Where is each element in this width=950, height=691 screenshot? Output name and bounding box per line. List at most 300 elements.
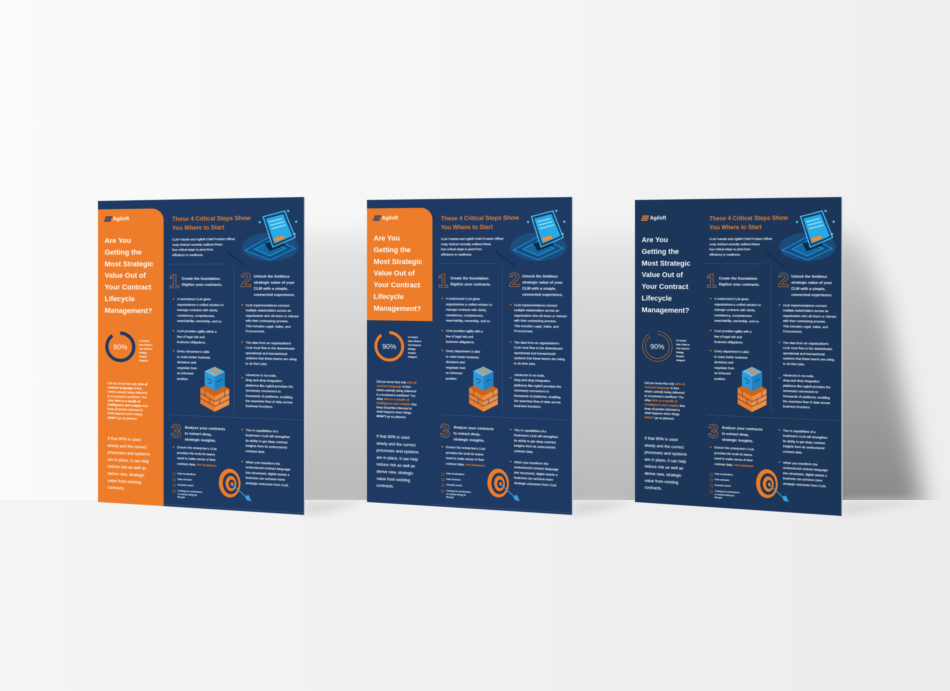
step 1 heading: Create the foundation. xyxy=(182,277,221,281)
step 2 bullets xyxy=(510,303,568,409)
step 2 bullets: Advances in no-code, xyxy=(514,373,545,377)
step 2 bullets xyxy=(778,303,842,413)
step 2 bullets xyxy=(241,303,300,409)
step 2 bullets: to do their jobs. xyxy=(783,362,805,366)
icon: target with arrow xyxy=(218,468,252,502)
step 2 heading: connected experience. xyxy=(254,293,295,297)
step 3 right bullets xyxy=(510,428,559,487)
logo: Agiloft xyxy=(382,215,398,221)
icon: logo mark xyxy=(641,215,649,221)
step 2 bullets: Advances in no-code, xyxy=(246,373,277,377)
text: if that 90%: If that 90% is used xyxy=(645,436,678,442)
step 3 heading: strategic insights. xyxy=(453,437,485,443)
checklist xyxy=(172,472,203,499)
step 1 bullets: CLM provides agility with a xyxy=(446,329,483,333)
step 2 bullets: The data from an organization's xyxy=(514,340,559,345)
donut caption xyxy=(676,339,690,362)
title: Are You xyxy=(374,234,400,242)
heading xyxy=(440,214,520,231)
step 3 right bullets: When you transform the xyxy=(514,460,548,466)
intro text xyxy=(172,237,236,258)
text: if that 90%: reduce risk as well as xyxy=(376,462,415,469)
title: Getting the xyxy=(374,246,411,254)
step 2 bullets: the seamless flow of data across xyxy=(783,399,830,405)
step 2 bullets: Advances in no-code, xyxy=(783,373,814,378)
step 2 bullets: platforms like Agiloft provides the xyxy=(783,384,831,389)
text: if that 90%: reduce risk as well as xyxy=(645,464,683,471)
icon: target with arrow xyxy=(755,468,793,504)
chart: 90% donut: 90% xyxy=(113,342,126,350)
step 2 bullets: Procurement. xyxy=(514,329,533,333)
step 3 right bullets: insights from its unstructured xyxy=(246,444,287,449)
step 2 bullets: operational and transactional xyxy=(514,351,555,356)
step 1 heading: Create the foundation. xyxy=(450,276,489,281)
checklist: Tracking the performance xyxy=(715,490,740,494)
step 2 bullets: Procurement. xyxy=(246,329,265,333)
step 1 bullets: consistency, completeness, xyxy=(446,313,484,317)
step 3 bullet xyxy=(709,444,773,471)
step 1 bullets: few of legal risk and xyxy=(446,334,473,338)
step 1 bullets: business obligations. xyxy=(714,340,743,344)
step 1 bullets xyxy=(172,297,224,381)
text: did you know: contract language is less xyxy=(645,386,679,390)
flyer 3: all navy version xyxy=(635,197,842,516)
step 3 right bullets: into structured, digital assets a xyxy=(246,470,289,477)
donut caption: Your Business xyxy=(139,348,152,350)
icon: target with arrow xyxy=(486,468,520,502)
logo: Agiloft xyxy=(650,215,666,221)
step 2 bullets: organization who all share or interact xyxy=(246,314,299,318)
text: did you know: WON'T go as planned. xyxy=(376,414,406,419)
step 3 bullet xyxy=(441,445,486,468)
text: if that 90% xyxy=(645,435,687,494)
donut caption: of Contract xyxy=(676,340,686,342)
step 1 bullets: position. xyxy=(177,377,189,381)
step 3 bullet: need to make sense of their xyxy=(446,456,484,462)
heading: These 4 Critical Steps Show xyxy=(172,215,251,222)
checklist: Tracking the performance xyxy=(177,490,202,494)
step 3 heading xyxy=(184,426,226,443)
title: Lifecycle xyxy=(374,292,404,301)
text: did you know: what's actively being delivered xyxy=(376,388,416,393)
checklist xyxy=(710,472,752,503)
step 2 bullets: multiple stakeholders across an xyxy=(246,308,291,313)
step 3 right bullets: When you transform the xyxy=(783,461,818,466)
text: if that 90%: are in place, it can help xyxy=(108,457,149,464)
donut caption: Data Critical to xyxy=(408,340,421,343)
text: if that 90% xyxy=(376,434,419,489)
checklist: Data visualizations xyxy=(715,473,733,476)
logo: Agiloft xyxy=(113,216,129,222)
text: did you know: contract language is less xyxy=(376,384,411,389)
step 2 bullets: business functions. xyxy=(246,404,273,409)
step 3 bullet: Ensure the enterprise's CLM xyxy=(177,445,217,451)
step 3 right bullets: its ability to get deep contract xyxy=(783,439,825,445)
step 3 bullet: Ensure the enterprise's CLM xyxy=(446,445,485,451)
step 2 bullets: operational and transactional xyxy=(246,351,287,356)
title: Management? xyxy=(374,304,421,313)
step 1 bullets: Every department is able xyxy=(446,349,480,353)
donut caption: of Contract xyxy=(139,340,149,342)
step 1 bullets: manage contracts with clarity, xyxy=(177,308,218,312)
step 3 right bullets: insights from its unstructured xyxy=(514,444,555,449)
checklist: Tracking the performance xyxy=(446,490,471,494)
step 2 heading: Unlock the limitless xyxy=(522,274,558,279)
flyer 2: orange title block version xyxy=(367,197,573,515)
step 3 right bullets xyxy=(778,428,842,496)
title: Your Contract xyxy=(642,282,688,291)
step 1 bullets: to make better business xyxy=(177,355,210,359)
step 2 bullets: multiple stakeholders across an xyxy=(514,308,559,313)
checklist: lifecycle xyxy=(715,496,722,499)
step 1 bullets: organizations a unified solution to xyxy=(177,302,224,307)
step 2 bullets: systems that these teams are using xyxy=(514,356,565,361)
step 2 bullets: CLM must flow to the downstream xyxy=(246,346,295,350)
text: did you know: Did you know that only 10% of xyxy=(645,381,685,386)
heading: These 4 Critical Steps Show xyxy=(709,214,788,222)
step 2 bullets: drag-and-drop integration xyxy=(783,378,820,383)
step 1 bullets xyxy=(709,296,773,384)
step 3 right bullets: strategic outcomes from CLM. xyxy=(514,481,557,487)
step 2 bullets: CLM implementations connect xyxy=(246,303,289,307)
step 3 right bullets: business's CLM will strengthen xyxy=(246,433,290,439)
heading: You Where to Start xyxy=(709,224,762,231)
text: did you know: Did you know that only 10% of xyxy=(376,380,416,384)
donut caption: Untapped xyxy=(676,359,685,362)
text: if that 90%: processes and systems xyxy=(645,450,687,457)
text: if that 90%: value from existing xyxy=(108,478,141,485)
step 2 bullets: thousands of platforms, enabling xyxy=(514,394,561,399)
step 1 bullets: negotiate from xyxy=(177,366,197,370)
text: if that 90%: If that 90% is used xyxy=(108,436,141,442)
step 3 right bullets: its ability to get deep contract xyxy=(246,438,288,444)
step 2 bullets: thousands of platforms, enabling xyxy=(246,394,293,399)
step 3 right bullets: business's CLM will strengthen xyxy=(783,434,827,440)
icon: phone on platform xyxy=(496,210,567,266)
step 2 bullets: systems that these teams are using xyxy=(246,356,297,361)
step 2 heading xyxy=(791,274,832,298)
step 1 heading xyxy=(181,276,222,287)
title: Value Out of xyxy=(374,269,415,277)
title: Value Out of xyxy=(642,271,683,279)
donut caption: Remains xyxy=(408,352,416,354)
title: Lifecycle xyxy=(642,294,672,302)
step 3 heading: to extract deep, xyxy=(722,432,749,437)
step 3 right bullets: business can achieve more xyxy=(246,476,285,482)
text: did you know: intelligence and insights that xyxy=(376,401,417,406)
step 1 bullets: searchability, ownership, and so. xyxy=(177,319,222,323)
step 1 bullets: Every department is able xyxy=(714,349,749,354)
text: if that 90%: are in place, it can help xyxy=(376,455,418,462)
step 1 bullets: an informed xyxy=(714,371,731,375)
step 2 heading xyxy=(522,274,564,297)
text: did you know: keep all parties informed to xyxy=(645,407,680,412)
icon: phone on platform xyxy=(780,207,835,262)
step 3 bullet: need to make sense of their xyxy=(714,456,753,462)
donut caption: Your Business xyxy=(676,347,689,350)
step 2 bullets: Procurement. xyxy=(783,329,802,333)
step 2 heading: strategic value of your xyxy=(254,281,295,285)
heading xyxy=(709,213,788,232)
step 3 right bullets xyxy=(241,428,291,487)
text: did you know: contract language is less xyxy=(108,386,142,390)
donut caption: Strategy xyxy=(139,352,147,354)
heading: These 4 Critical Steps Show xyxy=(441,214,519,222)
step 3 heading: strategic insights. xyxy=(722,438,753,443)
checklist: of contract during its xyxy=(446,493,466,496)
icon: logo mark xyxy=(373,215,381,221)
title: Your Contract xyxy=(374,281,420,289)
step 3 heading: strategic insights. xyxy=(185,438,216,443)
step 1 bullets: decisions and xyxy=(177,360,196,364)
step 1 bullets: CLM provides agility within a xyxy=(177,329,217,333)
text: did you know: WON'T go as planned. xyxy=(108,416,137,420)
step 1 bullets: searchability, ownership, and so. xyxy=(714,319,760,323)
step 3 right bullets: The AI capabilities of a xyxy=(783,429,816,434)
title: Management? xyxy=(642,306,689,314)
step 1 bullets: position. xyxy=(714,377,726,381)
text: did you know xyxy=(644,381,686,420)
title: Management? xyxy=(105,306,152,315)
step 3 bullet: provides the tools its teams xyxy=(177,451,215,456)
icon: logo mark xyxy=(104,216,112,222)
title: Are You xyxy=(105,236,131,245)
step 2 bullets: systems that these teams are using xyxy=(783,356,834,361)
chart: 90% outlined donut xyxy=(642,330,673,362)
step 2 bullets: The data from an organization's xyxy=(246,341,291,345)
step 1 bullets: organizations a unified solution to xyxy=(446,302,492,306)
step 2 bullets: CLM must flow to the downstream xyxy=(514,346,563,350)
step 3 right bullets: into structured, digital assets a xyxy=(514,470,558,476)
text: did you know: other 90% is a wealth of xyxy=(645,398,677,403)
step 3 bullet: need to make sense of their xyxy=(177,456,216,462)
step 1 heading: Digitize your contracts. xyxy=(450,282,491,287)
intro text: CLM Futurist and Agiloft Chief Product Officer xyxy=(709,237,772,241)
title: Are You xyxy=(642,236,668,244)
chart: 90% outlined donut: 90% xyxy=(648,341,659,350)
text: did you know: in a business's workflow? The xyxy=(108,394,147,399)
step 1 bullets: organizations a unified solution to xyxy=(714,302,761,307)
heading: You Where to Start xyxy=(441,224,493,231)
step 1 heading: Digitize your contracts. xyxy=(182,283,222,287)
step 1 heading: Digitize your contracts. xyxy=(719,282,760,287)
step 1 bullets: decisions and xyxy=(446,360,465,364)
checklist: of contract during its xyxy=(177,493,197,496)
step 3 bullet: contract data. For instance: xyxy=(446,462,485,467)
step 2 bullets: CLM implementations connect xyxy=(514,303,557,307)
donut caption xyxy=(407,336,422,359)
flyer 1: orange sidebar version xyxy=(98,197,305,515)
step 3 right bullets: business's CLM will strengthen xyxy=(514,433,558,439)
step 1 bullets: to make better business xyxy=(446,354,479,359)
step 2 bullets: CLM implementations connect xyxy=(783,303,827,308)
intro text: four critical steps to pivot from xyxy=(709,248,751,251)
donut caption: Data Critical to xyxy=(676,344,690,346)
text: did you know: keep all parties informed to xyxy=(376,406,412,410)
text: did you know: other 90% is a wealth of xyxy=(108,399,140,403)
step 2 bullets: with their contracting process. xyxy=(246,319,289,323)
step 2 bullets: to do their jobs. xyxy=(514,361,536,365)
text: if that 90%: wisely and the correct xyxy=(108,443,147,450)
step 3 heading: to extract deep, xyxy=(453,431,480,437)
step 1 bullets: an informed xyxy=(446,371,462,375)
donut caption: Remains xyxy=(676,355,684,358)
step 2 bullets: multiple stakeholders across an xyxy=(783,308,829,313)
intro text: CLM Futurist and Agiloft Chief Product Officer xyxy=(441,237,504,241)
step 2 heading: CLM with a simple, xyxy=(254,287,288,291)
text: did you know: what happens when things xyxy=(645,411,680,416)
checklist: Data extraction xyxy=(715,479,729,482)
text: did you know: other 90% is a wealth of xyxy=(376,397,409,402)
text: if that 90%: processes and systems xyxy=(108,450,150,457)
icon: brick tower xyxy=(200,366,230,412)
step 1 bullets: position. xyxy=(446,376,457,380)
text: if that 90%: derive new, strategic xyxy=(645,471,681,478)
step 3 heading: Analyze your contracts xyxy=(185,426,225,431)
step 2 heading xyxy=(254,274,296,297)
intro text: efficiency to readiness. xyxy=(441,253,472,256)
step 3 right bullets: The AI capabilities of a xyxy=(246,428,278,433)
text: if that 90%: value from existing xyxy=(645,478,678,485)
donut caption: Untapped xyxy=(139,360,148,362)
step 1 bullets: Every document is able xyxy=(177,349,210,354)
step 2 bullets: necessary connectors to xyxy=(246,388,281,393)
text: did you know: what's actively being delivered xyxy=(108,390,147,395)
icon: brick tower xyxy=(468,366,498,412)
step 2 bullets: necessary connectors to xyxy=(514,388,549,393)
step 3 right bullets: unstructured contract language xyxy=(783,466,828,472)
step 1 bullets: an informed xyxy=(177,371,193,375)
donut caption: Untapped xyxy=(408,356,417,358)
checklist xyxy=(441,472,472,499)
step 1 bullets: business obligations. xyxy=(446,340,475,344)
text: if that 90%: value from existing xyxy=(376,476,410,483)
step 1 bullets: searchability, ownership, and so. xyxy=(446,319,491,323)
step 2 bullets: operational and transactional xyxy=(783,351,825,356)
step 2 bullets: This includes Legal, Sales, and xyxy=(246,324,291,328)
step 3 right bullets: contract data. xyxy=(783,449,803,454)
step 1 bullets: A customized CLM gives xyxy=(446,297,480,301)
donut caption: Your Business xyxy=(408,344,421,347)
text: if that 90%: derive new, strategic xyxy=(376,469,413,476)
step 3 bullet: provides the tools its teams xyxy=(446,451,484,456)
step 1 heading xyxy=(719,276,760,288)
chart: 90% donut: 90% xyxy=(381,341,393,350)
heading: You Where to Start xyxy=(172,224,224,231)
step 2 heading: Unlock the limitless xyxy=(791,275,827,279)
step 3 bullet: contract data. For instance: xyxy=(177,462,217,467)
title: Your Contract xyxy=(105,283,151,291)
intro text: four critical steps to pivot from xyxy=(441,247,482,251)
step 2 bullets: The data from an organization's xyxy=(783,341,829,346)
step 3 right bullets: unstructured contract language xyxy=(246,465,290,471)
donut caption: Strategy xyxy=(676,351,684,354)
step 1 bullets: A centralized CLM gives xyxy=(177,297,211,301)
step 3 heading xyxy=(453,425,494,443)
step 1 heading xyxy=(450,276,491,287)
step 1 bullets: few of legal risk and xyxy=(177,335,205,339)
step 1 bullets: negotiate from xyxy=(446,365,466,370)
background: wall, floor and cast shadows xyxy=(303,216,950,691)
checklist: lifecycle xyxy=(177,496,185,499)
title: Getting the xyxy=(642,247,679,255)
step 1 bullets: negotiate from xyxy=(714,366,734,370)
step 2 bullets: to do their jobs. xyxy=(246,361,268,366)
step 2 heading: connected experience. xyxy=(791,293,832,297)
text: did you know xyxy=(376,380,417,419)
donut caption: Remains xyxy=(139,356,147,358)
text: if that 90%: are in place, it can help xyxy=(645,457,686,464)
step 2 heading: CLM with a simple, xyxy=(522,287,556,291)
text: did you know: keep all parties informed to xyxy=(108,407,143,412)
text: did you know: intelligence and insights that xyxy=(108,403,148,408)
step 2 bullets: with their contracting process. xyxy=(514,319,557,323)
step 3 heading xyxy=(722,425,763,445)
icon: phone on platform xyxy=(226,210,299,266)
step 2 bullets: organization who all share or interact xyxy=(783,314,836,318)
text: if that 90%: contracts. xyxy=(645,485,662,491)
step 1 bullets: few of legal risk and xyxy=(714,334,742,339)
panel: orange sidebar xyxy=(98,208,164,506)
text: if that 90%: contracts. xyxy=(376,483,394,489)
step 2 bullets: the seamless flow of data across xyxy=(246,399,293,404)
step 3 bullet xyxy=(172,445,217,468)
step 3 right bullets: strategic outcomes from CLM. xyxy=(246,481,289,487)
title: Getting the xyxy=(105,248,142,256)
chart: 90% donut xyxy=(104,331,136,362)
step 2 bullets: drag-and-drop integration xyxy=(514,378,550,383)
text: did you know: intelligence and insights that xyxy=(645,403,685,408)
intro text: four critical steps to pivot from xyxy=(172,248,213,251)
step 3 right bullets: business can achieve more xyxy=(514,476,553,481)
checklist: Data visualizations xyxy=(446,473,464,476)
title xyxy=(104,236,154,315)
step 2 bullets: drag-and-drop integration xyxy=(246,378,282,383)
step 2 bullets: necessary connectors to xyxy=(783,389,818,394)
step 2 bullets: with their contracting process. xyxy=(783,319,826,323)
heading xyxy=(172,215,251,231)
intro text: efficiency to readiness. xyxy=(709,253,741,256)
step 2 bullets: CLM must flow to the downstream xyxy=(783,346,832,351)
checklist: Data extraction xyxy=(446,478,461,481)
checklist: Data extraction xyxy=(177,478,192,481)
checklist: Semantic search xyxy=(715,484,731,487)
text: did you know xyxy=(107,382,148,420)
intro text: efficiency to readiness. xyxy=(172,253,203,257)
title xyxy=(641,236,691,315)
step 3 bullet: contract data. For instance: xyxy=(714,462,754,468)
step 2 heading: strategic value of your xyxy=(522,280,563,285)
text: if that 90%: wisely and the correct xyxy=(376,441,415,447)
step 3 right bullets: contract data. xyxy=(514,449,533,453)
step 2 bullets: This includes Legal, Sales, and xyxy=(783,324,828,329)
checklist: Data visualizations xyxy=(177,473,196,476)
step 1 bullets: manage contracts with clarity, xyxy=(446,308,487,312)
step 1 bullets: A customized CLM gives xyxy=(714,297,749,301)
text: if that 90%: contracts. xyxy=(108,485,125,491)
text: did you know: Did you know that only 10% of xyxy=(108,382,148,386)
text: did you know: what happens when things xyxy=(376,410,411,415)
step 3 right bullets: When you transform the xyxy=(246,460,280,466)
text: if that 90%: If that 90% is used xyxy=(376,434,410,440)
checklist: Semantic search xyxy=(446,484,462,487)
donut caption: of Contract xyxy=(408,336,418,339)
chart: 90% donut xyxy=(374,330,404,362)
text: did you know: what's actively being delivered xyxy=(645,390,684,395)
step 3 heading: to extract deep, xyxy=(185,432,212,437)
step 2 bullets: business functions. xyxy=(783,404,810,409)
step 1 bullets: to make better business xyxy=(714,355,747,359)
